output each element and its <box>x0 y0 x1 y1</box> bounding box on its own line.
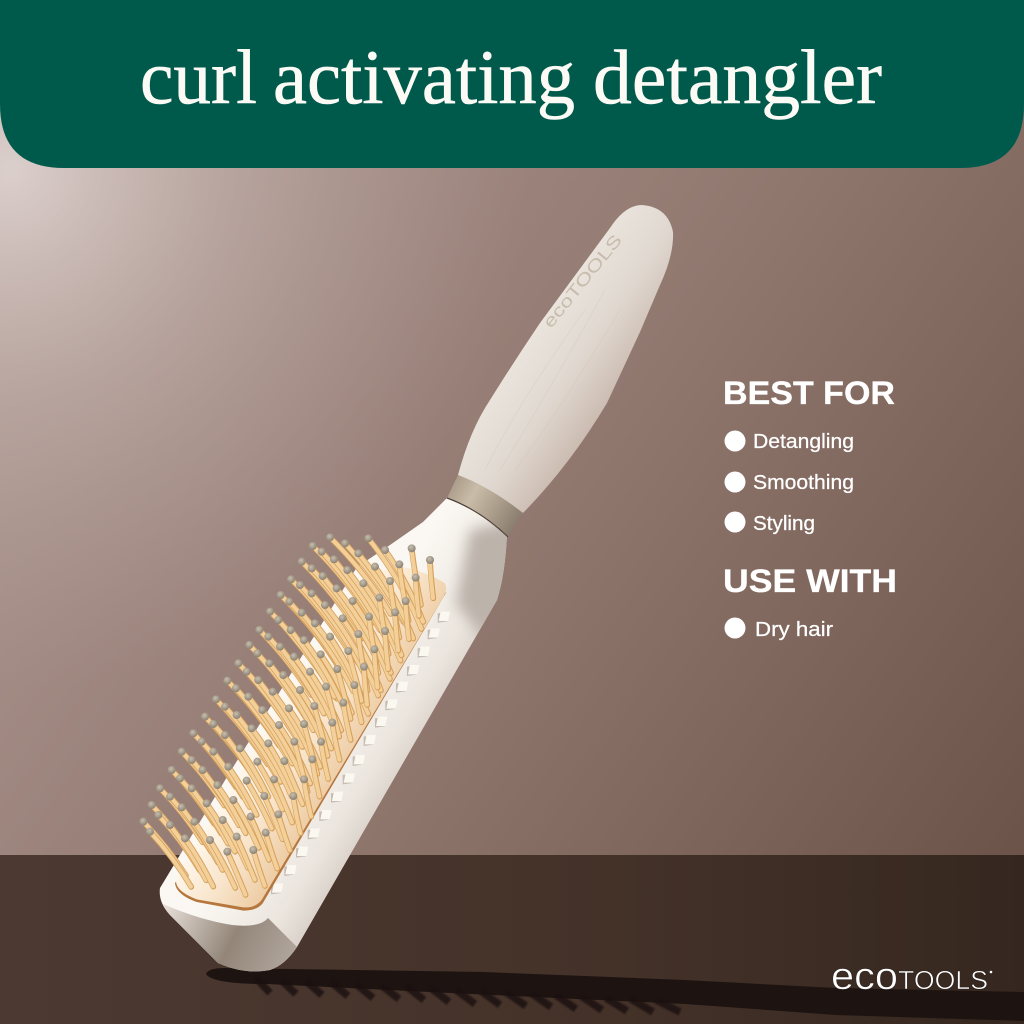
pad recess edge <box>175 592 447 911</box>
bristle row 1 <box>139 533 391 876</box>
title: detangler <box>593 34 882 120</box>
handle engraved logo: ecoTOOLS <box>539 231 626 332</box>
list item: dry hair <box>724 618 833 641</box>
bristle row 3 <box>166 549 410 880</box>
cushion pad <box>176 567 446 907</box>
ecotools logo: TOOLS <box>898 967 988 995</box>
title <box>140 34 882 120</box>
bristle row 4 <box>181 534 422 887</box>
features list <box>723 375 897 641</box>
brush handle <box>458 205 673 513</box>
list item: detangling: Detangling <box>753 431 854 453</box>
title: activating <box>273 34 575 120</box>
table surface <box>0 855 1024 1024</box>
list item: dry hair: Dry hair <box>755 619 833 641</box>
bristle row 6 <box>223 544 421 895</box>
ecotools logo: eco <box>831 956 898 998</box>
list item: styling <box>724 512 815 535</box>
list item: styling: Styling <box>753 513 815 535</box>
bristle row 2 <box>146 539 404 887</box>
brush shadow on table <box>206 968 1024 1021</box>
title banner <box>0 0 1024 168</box>
metal collar <box>447 475 523 537</box>
list item: smoothing: Smoothing <box>753 472 854 494</box>
heading: use with: USE WITH <box>723 563 897 599</box>
brush head <box>160 498 525 980</box>
product: detangling brush <box>139 205 673 980</box>
title: curl <box>140 34 257 120</box>
vent slots <box>271 612 450 894</box>
foam pad, vent slots and bristles <box>139 533 450 911</box>
ecotools logo <box>831 956 992 998</box>
bristle row 5 <box>206 546 423 888</box>
heading: best for: BEST FOR <box>723 375 895 411</box>
bristle row 7 <box>249 556 434 886</box>
